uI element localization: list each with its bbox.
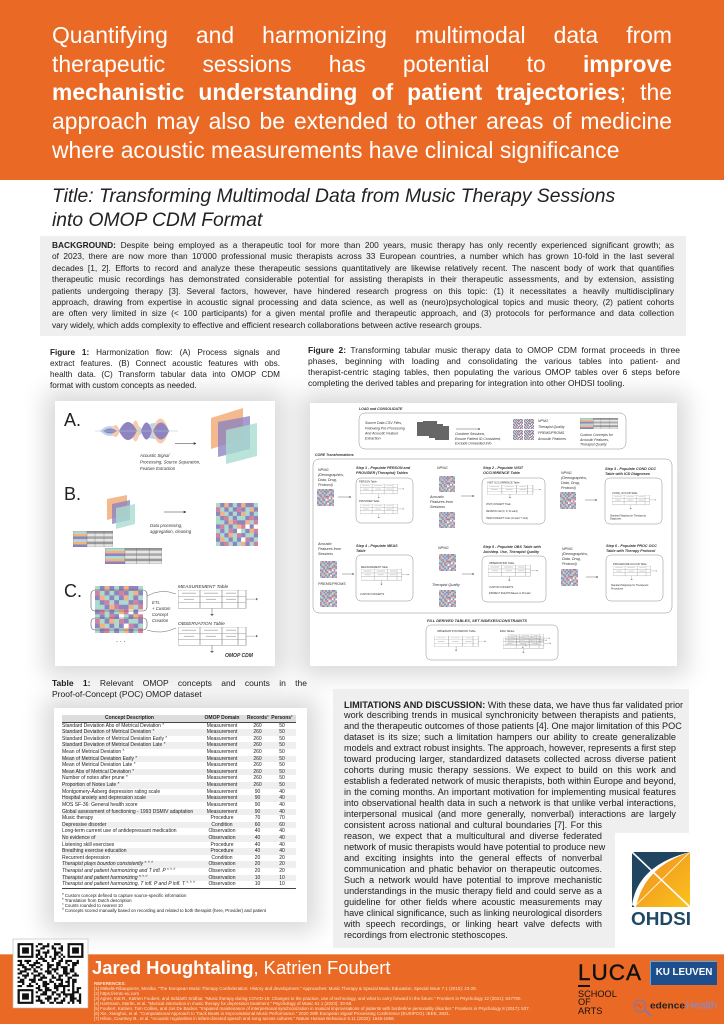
references: [3] Agres, Kat R., Katrien Foubert, and Siddarth Sridhar. "Music therapy during COVID-19: Changes to the practice, use of technology, and what to carry forward in the future." Frontiers in Psychology 12 (2021): 647790. bbox=[94, 996, 522, 1001]
table: OMOP concepts and counts: Personsc bbox=[271, 713, 293, 721]
authors: Jared Houghtaling, Katrien Foubert bbox=[92, 957, 390, 978]
table: OMOP concepts and counts: Measurement bbox=[207, 762, 237, 768]
table: OMOP concepts and counts: Standard Deviation of Metrical Deviation a bbox=[62, 728, 154, 735]
table: OMOP concepts and counts: Therapist and patient harmonizing a, b, d bbox=[62, 873, 147, 881]
step 4: Table bbox=[356, 549, 366, 553]
step 2: Features from bbox=[430, 500, 453, 504]
limitations text: communication and phatic behavior on therapeutic outcomes. bbox=[344, 864, 602, 874]
step 1: Protocol) bbox=[318, 483, 334, 487]
step 5 bbox=[432, 545, 546, 607]
background text: of 2023, there are now more than 10'000 professional music therapists across 33 European countries, a number which has grown 10-fold in the last several bbox=[52, 251, 674, 261]
table: OMOP concepts and counts: 260 bbox=[253, 729, 262, 735]
table: OMOP concepts and counts: Observation bbox=[209, 828, 235, 834]
logo: edence Health bbox=[634, 1000, 717, 1016]
step 6: Procedures bbox=[611, 588, 624, 590]
section A: A. bbox=[64, 410, 81, 430]
load and consolidate: Ensure Patient ID Consistent, bbox=[455, 437, 501, 441]
key message: mechanistic understanding of patient trajectories; the bbox=[52, 79, 672, 105]
limitations text: work describing trends in musical synchronicity between therapists and patients, bbox=[344, 710, 676, 720]
table: OMOP concepts and counts: 20 bbox=[279, 868, 285, 874]
table: OMOP concepts and counts: 40 bbox=[255, 835, 260, 841]
table: OMOP concepts and counts: Standard Deviation of Metrical Deviation Late a bbox=[62, 741, 165, 748]
section A: Acoustic Signal bbox=[139, 453, 170, 458]
logo bar bbox=[578, 985, 590, 987]
table: OMOP concepts and counts: 40 bbox=[279, 828, 285, 834]
layered feature planes bbox=[211, 408, 257, 464]
section C: OMOP CDM bbox=[225, 653, 254, 659]
logo: OHDSI: OHDSI bbox=[631, 908, 691, 929]
table: OMOP concepts and counts: Mean of Metrical Deviation a bbox=[62, 747, 124, 755]
load and consolidate: Acoustic Features bbox=[537, 437, 566, 441]
step 4 bbox=[317, 542, 413, 607]
logo: KU Leuven bbox=[650, 961, 717, 985]
step 5: Join/dep. Use, Therapist Quality bbox=[483, 550, 540, 554]
table: OMOP concepts and counts: OMOP Domain bbox=[205, 715, 239, 721]
limitations text: dataset is its size; such a limitation hampers our ability to create generalizable bbox=[344, 732, 676, 742]
load and consolidate: Therapist Quality bbox=[538, 425, 565, 429]
table: OMOP concepts and counts: Measurement bbox=[207, 756, 237, 762]
title: Title: Transforming Multimodal Data from Music Therapy Sessions bbox=[52, 186, 615, 207]
fill derived tables: OBSERVATION PERIOD Table bbox=[437, 629, 476, 633]
figure 2 caption bbox=[308, 345, 680, 388]
logo: edence Health: Health bbox=[686, 1000, 717, 1012]
background text: therapeutic music recordings has demonstrated considerable potential for assisting therapists in their therapeutic assessments, and by extension, assisting bbox=[52, 274, 674, 284]
background text: decades [1, 2]. Efforts to record and analyze these therapeutic sessions quantitatively are likewise relatively recent. The nascent body of work that quantifies bbox=[52, 263, 674, 273]
step 3 bbox=[560, 467, 662, 524]
fill derived tables bbox=[426, 618, 558, 660]
step 3: Data, Drug, bbox=[561, 481, 580, 485]
table: OMOP concepts and counts: Observation bbox=[209, 868, 235, 874]
table: OMOP concepts and counts: 50 bbox=[279, 729, 285, 735]
core transformations bbox=[313, 453, 672, 613]
table: OMOP concepts and counts: Observation bbox=[209, 835, 235, 841]
table: OMOP concepts and counts: 20 bbox=[279, 861, 285, 867]
load and consolidate: Custom Concepts for bbox=[580, 433, 614, 437]
LUCA wordmark: LUCA bbox=[578, 960, 642, 985]
table: OMOP concepts and counts: 10 bbox=[255, 881, 260, 887]
QR code bbox=[12, 938, 88, 1008]
table 1 caption: Table 1: Relevant OMOP concepts and counts in the bbox=[52, 678, 307, 688]
table: OMOP concepts and counts: 40 bbox=[279, 842, 285, 848]
table: OMOP concepts and counts: Recurrent depression bbox=[62, 855, 110, 861]
table: OMOP concepts and counts: 40 bbox=[279, 789, 285, 795]
load and consolidate: Following Pre-Processing bbox=[365, 426, 405, 430]
figure 1 caption: Figure 1: Harmonization flow: (A) Process signals and bbox=[50, 348, 280, 357]
table: OMOP concepts and counts: Recordsc bbox=[247, 713, 269, 721]
step 1 bbox=[317, 466, 413, 523]
table: OMOP concepts and counts: Concept Description bbox=[105, 715, 154, 721]
figure 1 caption: extract features. (B) Connect acoustic features with obs. bbox=[50, 359, 280, 368]
table: OMOP concepts and counts: Observation bbox=[209, 861, 235, 867]
step 4: Sessions bbox=[318, 552, 333, 556]
limitations text: establish a federated network of music therapists, both within Europe and beyond, bbox=[344, 776, 676, 786]
step 2: Step 2 - Populate VISIT bbox=[483, 466, 524, 470]
table: OMOP concepts and counts: 50 bbox=[279, 769, 285, 775]
table: OMOP concepts and counts: Montgomery-Åsberg depression rating scale bbox=[62, 789, 160, 795]
references: [2] https://emtc-eu.com bbox=[94, 991, 139, 996]
step 4: Features from bbox=[318, 547, 341, 551]
limitations text: models and extract robust insights. The approach, however, represents a first step bbox=[344, 743, 676, 753]
logo: LUCA School of Arts bbox=[578, 960, 642, 1016]
load and consolidate: LOAD and CONSOLIDATE bbox=[359, 407, 403, 411]
section A: Feature Extraction bbox=[140, 466, 176, 471]
table: OMOP concepts and counts: Procedure bbox=[210, 842, 234, 848]
table: OMOP concepts and counts: 40 bbox=[255, 828, 260, 834]
section C: ETL bbox=[152, 600, 160, 605]
step 4: PREMS/PROMS bbox=[318, 582, 346, 586]
table: OMOP concepts and counts: 90 bbox=[255, 789, 260, 795]
section B: aggregation, cleaning bbox=[150, 529, 192, 534]
limitations text: Such a network would have potential to improve mechanistic bbox=[344, 875, 602, 885]
table: OMOP concepts and counts: Measurement bbox=[207, 782, 237, 788]
table: OMOP concepts and counts: Therapist and patient harmonizing, T infl. P and P infl. T a, b, d bbox=[62, 880, 195, 887]
step 1: NPNG bbox=[318, 468, 329, 472]
table: OMOP concepts and counts: 50 bbox=[279, 782, 285, 788]
table: OMOP concepts and counts: 60 bbox=[279, 822, 285, 828]
step 6: Data, Drug, bbox=[562, 557, 581, 561]
limitations text: cohorts during music therapy sessions. We expect to build on this work and bbox=[344, 765, 676, 775]
table: OMOP concepts and counts: Depressive disorder bbox=[62, 822, 106, 828]
panel: figure 1 bbox=[55, 401, 275, 666]
step 2: Acoustic bbox=[429, 495, 444, 499]
step 5: NPNG bbox=[438, 546, 449, 550]
references: [6] Xie, Xianghui, et al. "Computational Approach to Track Beats in Improvisational Music Performance." 2020 28th European Signal Processing Conference (EUSIPCO). IEEE, 2021. bbox=[94, 1011, 450, 1016]
fill derived tables: FILL DERIVED TABLES, SET INDEXES/CONSTRAINTS bbox=[427, 618, 527, 623]
step 3: Table with ICD Diagnoses bbox=[605, 472, 650, 476]
table: OMOP concepts and counts: Measurement bbox=[207, 742, 237, 748]
school of arts: SCHOOL bbox=[578, 988, 617, 998]
key message: approach may also be extended to other areas of medicine bbox=[52, 108, 672, 134]
section C: + Custom bbox=[152, 606, 171, 611]
table: OMOP concepts and counts: Listening skill exercises bbox=[62, 842, 114, 848]
table: OMOP concepts and counts: Measurement bbox=[207, 802, 237, 808]
table: OMOP concepts and counts: Mean of Metrical Deviation Early a bbox=[62, 754, 137, 762]
table: OMOP concepts and counts: Number of notes after prune a bbox=[62, 774, 128, 781]
limitations text: toward producing larger, standardized datasets collected across diverse patient bbox=[344, 754, 676, 764]
step 2: SESSION Visit (F, S, W ward) bbox=[486, 510, 518, 513]
title: into OMOP CDM Format bbox=[52, 210, 262, 230]
table: OMOP concepts and counts: Measurement bbox=[207, 795, 237, 801]
table footnotes bbox=[62, 891, 266, 913]
step 4: Acoustic bbox=[317, 542, 332, 546]
table 1 caption bbox=[52, 678, 307, 699]
step 3: COND_OCCUR Table bbox=[612, 491, 638, 495]
step 2: VISIT OCCURRENCE Table bbox=[487, 480, 520, 484]
table footnotes: d Concepts scored manually based on recording and related to both therapist (here, Provider) and patient bbox=[62, 907, 266, 913]
figure 1 caption bbox=[50, 348, 280, 390]
figure 2 caption: Figure 2: Transforming tabular music therapy data to OMOP CDM format proceeds in three bbox=[308, 345, 680, 355]
step 5: CUSTOM CONCEPTS bbox=[489, 586, 514, 589]
table: OMOP concepts and counts: 40 bbox=[279, 795, 285, 801]
fill derived tables: ERA Tables bbox=[500, 629, 515, 633]
table: OMOP concepts and counts: 20 bbox=[255, 861, 260, 867]
table: OMOP concepts and counts: 260 bbox=[253, 723, 262, 729]
panel: limitations and discussion bbox=[333, 689, 615, 948]
step 6 bbox=[561, 544, 663, 601]
table: OMOP concepts and counts: 20 bbox=[255, 855, 260, 861]
limitations text: LIMITATIONS AND DISCUSSION: With these data, we have thus far validated prior bbox=[344, 700, 683, 710]
table: OMOP concepts and counts: 20 bbox=[255, 868, 260, 874]
limitations text: with speech recordings, or linking heart valve defects with bbox=[344, 919, 602, 929]
key message: where acoustic measurements have clinical significance bbox=[52, 137, 619, 163]
section A: Processing, Source Separation, bbox=[140, 460, 200, 464]
table: OMOP concepts and counts: 50 bbox=[279, 723, 285, 729]
references: [4] Hartmann, Martin, et al. "Musical interaction in music therapy for depression treatment." Psychology of Music 51.1 (2023): 33-50. bbox=[94, 1001, 352, 1006]
table: OMOP concepts and counts: Therapist and patient harmonizing and T infl. P a, b, d bbox=[62, 866, 175, 874]
load and consolidate: And Acoustic Feature bbox=[364, 432, 398, 436]
step 2: NPNG bbox=[437, 466, 448, 470]
table: OMOP concepts and counts: 260 bbox=[253, 736, 262, 742]
table: OMOP concepts and counts: 260 bbox=[253, 742, 262, 748]
section C bbox=[64, 581, 258, 659]
figure 2 caption: phases, beginning with loading and consolidating the various tables into patient- and bbox=[308, 356, 680, 366]
section C: Concept bbox=[152, 612, 169, 617]
limitations text: reason, we expect that a multicultural and diverse federated bbox=[344, 831, 602, 841]
step 6: Table with Therapy Protocol bbox=[606, 549, 656, 553]
table: OMOP concepts and counts: Therapist plays bourdon consistently a, b, d bbox=[62, 860, 153, 867]
limitations text: in the coming months. An important motivation for implementing musical features bbox=[344, 787, 676, 797]
table: OMOP concepts and counts: 40 bbox=[255, 842, 260, 848]
limitations text: network of music therapists would have potential to produce new bbox=[344, 842, 605, 852]
table: OMOP concepts and counts: Proportion of Notes Late a bbox=[62, 780, 119, 788]
key message bbox=[52, 22, 672, 163]
figure 1 caption: format with custom concepts as needed. bbox=[50, 381, 197, 390]
references bbox=[94, 981, 530, 1021]
school of arts: ARTS bbox=[578, 1006, 602, 1016]
table: OMOP concepts and counts: Measurement bbox=[207, 769, 237, 775]
table: OMOP concepts and counts: Measurement bbox=[207, 736, 237, 742]
footer band bbox=[0, 954, 724, 1024]
table: OMOP concepts and counts: 60 bbox=[255, 822, 260, 828]
table: OMOP concepts and counts: 40 bbox=[279, 802, 285, 808]
references: REFERENCES: bbox=[94, 981, 126, 986]
load and consolidate: PREMS/PROMS bbox=[538, 431, 565, 435]
table: OMOP concepts and counts: 50 bbox=[279, 736, 285, 742]
limitations text: and the therapeutic outcomes of those patients [4]. One major limitation of this POC bbox=[344, 721, 682, 731]
step 3: (Demographics, bbox=[561, 476, 587, 480]
step 3: NPNG bbox=[561, 471, 572, 475]
table: OMOP concepts and counts: Measurement bbox=[207, 809, 237, 815]
table 1 caption: Proof-of-Concept (POC) OMOP dataset bbox=[52, 689, 202, 699]
load and consolidate: Source Data CSV Files, bbox=[365, 421, 402, 425]
key message: Quantifying and harmonizing multimodal data from bbox=[52, 22, 672, 48]
step 4: MEASUREMENT Table bbox=[361, 565, 389, 569]
table footnotes: b Translation from Dutch description bbox=[62, 896, 132, 903]
limitations text bbox=[344, 700, 683, 940]
step 1: (Demographics, bbox=[318, 473, 344, 477]
figure 1 caption: health data. (C) Transform tabular data into OMOP CDM bbox=[50, 370, 280, 379]
table: OMOP concepts and counts: Condition bbox=[211, 822, 233, 828]
section C: . . . bbox=[116, 637, 126, 644]
step 1: PROVIDER (Therapist) Tables bbox=[356, 471, 408, 475]
step 1: Step 1 - Populate PERSON and bbox=[356, 466, 411, 470]
logo: edence Health: edence bbox=[650, 1000, 685, 1012]
load and consolidate bbox=[359, 407, 626, 449]
table: OMOP concepts and counts: Observation bbox=[209, 881, 235, 887]
step 6: NPNG bbox=[562, 547, 573, 551]
background text: approach, drawing from expertise in acoustic signal processing and data science, as well as (neuro)psychological topics and music theory, (2) patient cohorts bbox=[52, 297, 674, 307]
table: OMOP concepts and counts: 260 bbox=[253, 749, 262, 755]
step 6: Step 6 - Populate PROC OCC bbox=[606, 544, 657, 548]
step 2: OCCURRENCE Table bbox=[483, 471, 520, 475]
table: OMOP concepts and counts: Measurement bbox=[207, 729, 237, 735]
step 1: Data, Drug, bbox=[318, 478, 337, 482]
table: OMOP concepts and counts: Observation bbox=[209, 875, 235, 881]
limitations text: have clinical significance, such as linking neurological disorders bbox=[344, 908, 602, 918]
table: OMOP concepts and counts: 40 bbox=[279, 835, 285, 841]
limitations text: into observational health data in such a network is that unlike verbal interactions, bbox=[344, 798, 676, 808]
table footnotes: c Counts rounded to nearest 10 bbox=[62, 901, 123, 908]
step 1: PERSON Table bbox=[359, 480, 377, 484]
panel: figure 2 bbox=[310, 403, 677, 666]
table: OMOP concepts and counts: Music therapy bbox=[62, 815, 93, 821]
table: OMOP concepts and counts: 260 bbox=[253, 782, 262, 788]
table: OMOP concepts and counts: Global assessment of functioning - 1993 DSMIV adaptation bbox=[62, 809, 193, 815]
table: OMOP concepts and counts: No evidence of bbox=[62, 835, 95, 841]
table: OMOP concepts and counts: 50 bbox=[279, 756, 285, 762]
references: [5] Foubert, Katrien, Tom Collins, and Jos De Backer. "Impaired maintenance of interpersonal synchronization in musical improvisations of patients with borderline personality disorder." Frontiers in Psychology 8 (2017): 537. bbox=[94, 1006, 530, 1011]
table footnotes: a Custom concept defined to capture source-specific information bbox=[62, 891, 186, 898]
table: OMOP concepts and counts: Standard Deviation of Metrical Deviation Early a bbox=[62, 734, 167, 742]
step 6: PROCEDURE OCCUR Table bbox=[613, 562, 647, 566]
table: OMOP concepts and counts: Mean Abs of Metrical Deviation a bbox=[62, 767, 134, 775]
table: OMOP concepts and counts: Measurement bbox=[207, 775, 237, 781]
table: OMOP concepts and counts: MOS SF-36: General health score bbox=[62, 802, 138, 808]
step 3: Diagnoses bbox=[610, 518, 622, 520]
step 1: PROVIDER Table bbox=[359, 499, 380, 503]
table: OMOP concepts and counts: Measurement bbox=[207, 749, 237, 755]
table: OMOP concepts and counts: 260 bbox=[253, 775, 262, 781]
step 5: OBSERVATION Table bbox=[489, 561, 515, 565]
table: OMOP concepts and counts: Breathing exercise education bbox=[62, 848, 126, 854]
table: OMOP concepts and counts: 50 bbox=[279, 742, 285, 748]
step 2: ITEM CONCEPT Visits (Vi ward Y Visit) bbox=[486, 517, 528, 520]
table: OMOP concepts and counts: 10 bbox=[279, 875, 285, 881]
section C: C. bbox=[64, 581, 82, 601]
load and consolidate: NPNG bbox=[538, 419, 548, 423]
table: OMOP concepts and counts: 90 bbox=[255, 809, 260, 815]
references: [7] Hilton, Courtney B., et al. "Acoustic regularities in infant-directed speech and song across cultures." Nature Human Behaviour 6.11 (2022): 1545-1556. bbox=[94, 1016, 395, 1021]
step 3: Step 3 - Populate COND OCC bbox=[605, 467, 656, 471]
load and consolidate: Acoustic Features, bbox=[579, 438, 609, 442]
references: [1] Mäkelä-Ribaupierre, Monika. "The European Music Therapy Confederation: History and development." Approaches: Music Therapy & Special Music Education, Special Issue 7.1 (2015): 23-29. bbox=[94, 986, 477, 991]
logo: OHDSI bbox=[631, 852, 691, 929]
limitations text: understandings in the music therapy field and could serve as a bbox=[344, 886, 602, 896]
panel: background bbox=[40, 236, 686, 336]
table: OMOP concepts and counts: 20 bbox=[279, 855, 285, 861]
limitations text: consistent across national and cultural boundaries [7]. For this bbox=[344, 820, 602, 830]
table: OMOP concepts and counts: 50 bbox=[279, 775, 285, 781]
school of arts: OF bbox=[578, 997, 591, 1007]
load and consolidate: Therapist Quality bbox=[580, 442, 607, 446]
step 4: CUSTOM CONCEPTS bbox=[360, 593, 385, 596]
section B bbox=[64, 484, 258, 564]
limitations text: recordings from electronic stethoscopes. bbox=[344, 930, 508, 940]
table: OMOP concepts and counts: 50 bbox=[279, 762, 285, 768]
step 6: Protocol) bbox=[562, 562, 578, 566]
background text: patients undergoing therapy [3]. Several factors, however, have hindered research progress on this topic: (1) it necessitates a heavily multidisciplinary bbox=[52, 286, 674, 296]
section B: Data processing, bbox=[150, 523, 182, 528]
title bbox=[52, 186, 615, 230]
step 6: Standard Mappings for Therapeutic bbox=[611, 584, 649, 587]
background text: are often very limited in size (< 100 participants) for a given mental profile and therapeutic approach, and (3) protocols for performance and data collection bbox=[52, 308, 674, 318]
table: OMOP concepts and counts: 40 bbox=[279, 848, 285, 854]
step 3: Standard Mapping for Therapeutic bbox=[610, 514, 647, 518]
load and consolidate: Exclude Unneeded Info bbox=[455, 442, 491, 446]
header banner bbox=[0, 0, 724, 180]
step 2: Sessions bbox=[430, 505, 445, 509]
background text: vary widely, which adds complexity to effective and efficient research collaborations between active research groups. bbox=[52, 320, 482, 330]
background text: BACKGROUND: Despite being employed as a therapeutic tool for more than 200 years, music therapy has only recently experienced significant growth; as bbox=[52, 240, 674, 250]
table: OMOP concepts and counts: Standard Deviation Abs of Metrical Deviation a bbox=[62, 721, 164, 729]
core transformations: CORE Transformations bbox=[315, 453, 354, 457]
table: OMOP concepts and counts: Mean of Metrical Deviation Late a bbox=[62, 761, 135, 768]
step 5: Therapist Quality bbox=[432, 583, 461, 587]
table: OMOP concepts and counts bbox=[62, 713, 296, 889]
load and consolidate: Extraction bbox=[365, 436, 381, 440]
table: OMOP concepts and counts: 70 bbox=[255, 815, 260, 821]
step 6: (Demographics, bbox=[562, 552, 588, 556]
step 5: Step 5 - Populate OBS Table with bbox=[483, 545, 542, 549]
table: OMOP concepts and counts: 10 bbox=[255, 875, 260, 881]
table: OMOP concepts and counts: Procedure bbox=[210, 848, 234, 854]
arrow bbox=[175, 443, 196, 444]
school of arts bbox=[578, 988, 617, 1016]
section C: MEASUREMENT Table bbox=[178, 584, 229, 590]
step 3: Protocol) bbox=[561, 486, 577, 490]
table: OMOP concepts and counts: 90 bbox=[255, 795, 260, 801]
table: OMOP concepts and counts: Measurement bbox=[207, 723, 237, 729]
limitations text: and exciting insights into the general effects of nonverbal bbox=[344, 853, 602, 863]
table: OMOP concepts and counts: Measurement bbox=[207, 789, 237, 795]
table: OMOP concepts and counts: 260 bbox=[253, 769, 262, 775]
figure 2 caption: completing the derived tables and preparing for integration into other OHDSI tooling. bbox=[308, 378, 625, 388]
step 2 bbox=[429, 466, 545, 528]
table: OMOP concepts and counts: 40 bbox=[255, 848, 260, 854]
section C: Creation bbox=[152, 618, 169, 623]
section B: B. bbox=[64, 484, 81, 504]
panel: table 1 bbox=[54, 708, 307, 922]
step 5: INDIRECT EVENTS Based on Provider bbox=[489, 592, 531, 595]
table: OMOP concepts and counts: 70 bbox=[279, 815, 285, 821]
table: OMOP concepts and counts: 260 bbox=[253, 762, 262, 768]
table: OMOP concepts and counts: Hospital anxiety and depression scale bbox=[62, 795, 146, 801]
step 2: VISIT CONCEPT Trials bbox=[486, 503, 511, 506]
section C: OBSERVATION Table bbox=[178, 621, 225, 627]
table: OMOP concepts and counts: Long-term current use of antidepressant medication bbox=[62, 828, 177, 834]
section A bbox=[64, 408, 257, 471]
load and consolidate: Combine Sessions, bbox=[455, 432, 485, 436]
table: OMOP concepts and counts: Condition bbox=[211, 855, 233, 861]
figure 2 caption: therapist-centric staging tables, then populating the various OMOP tables over 6 steps before bbox=[308, 367, 680, 377]
limitations text: interpersonal musical (and more generally, nonverbal) interactions are largely bbox=[344, 809, 676, 819]
table: OMOP concepts and counts: 260 bbox=[253, 756, 262, 762]
key message: therapeutic sessions has potential to improve bbox=[52, 51, 672, 77]
table: OMOP concepts and counts: 10 bbox=[279, 881, 285, 887]
logo: KU Leuven: KU LEUVEN bbox=[656, 967, 712, 978]
table: OMOP concepts and counts: Procedure bbox=[210, 815, 234, 821]
table: OMOP concepts and counts: 40 bbox=[279, 809, 285, 815]
waveform bbox=[95, 418, 178, 444]
step 4: Step 4 - Populate MEAS bbox=[356, 544, 398, 548]
background text bbox=[52, 240, 674, 330]
table: OMOP concepts and counts: 90 bbox=[255, 802, 260, 808]
limitations text: guideline for other fields where acoustic measurements may bbox=[344, 897, 602, 907]
table: OMOP concepts and counts: 50 bbox=[279, 749, 285, 755]
